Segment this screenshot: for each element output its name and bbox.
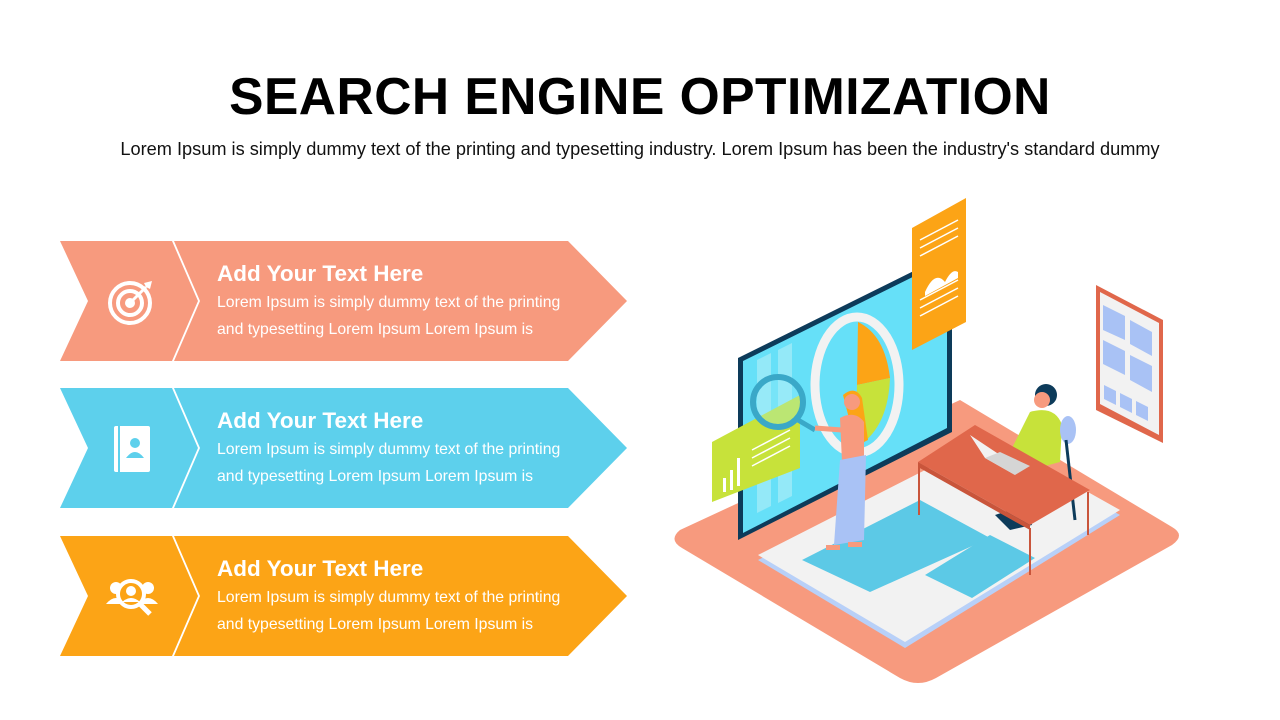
heading 2: Add Your Text Here: [217, 408, 423, 433]
text 1: Lorem Ipsum is simply dummy text of the printing and typesetting Lorem Ipsum Lorem Ipsum is: [217, 294, 560, 338]
icon: target: [108, 281, 152, 325]
subtitle: Lorem Ipsum is simply dummy text of the printing and typesetting industry. Lorem Ipsum has been the industry's standard dummy: [120, 139, 1160, 159]
heading 1: Add Your Text Here: [217, 261, 423, 286]
title: SEARCH ENGINE OPTIMIZATION: [229, 67, 1051, 125]
heading 3: Add Your Text Here: [217, 556, 423, 581]
platform: [758, 437, 1120, 648]
icon: people search: [106, 579, 158, 616]
text 2: Lorem Ipsum is simply dummy text of the printing and typesetting Lorem Ipsum Lorem Ipsum is: [217, 441, 560, 485]
panel: row 3: [60, 536, 627, 656]
monitor: [738, 252, 952, 540]
woman: [815, 391, 868, 550]
text 3: Lorem Ipsum is simply dummy text of the printing and typesetting Lorem Ipsum Lorem Ipsum is: [217, 589, 560, 633]
magnifier: [753, 377, 815, 430]
pie chart: [815, 317, 899, 453]
panel: row 2: [60, 388, 627, 508]
wall board: [1096, 285, 1163, 443]
desk with laptop: [918, 425, 1090, 575]
green card: [712, 395, 800, 502]
floor: [674, 400, 1179, 683]
man: [995, 384, 1076, 530]
panel: row 1: [60, 241, 627, 361]
icon: contact book: [114, 426, 150, 472]
floating doc orange: [912, 198, 966, 350]
